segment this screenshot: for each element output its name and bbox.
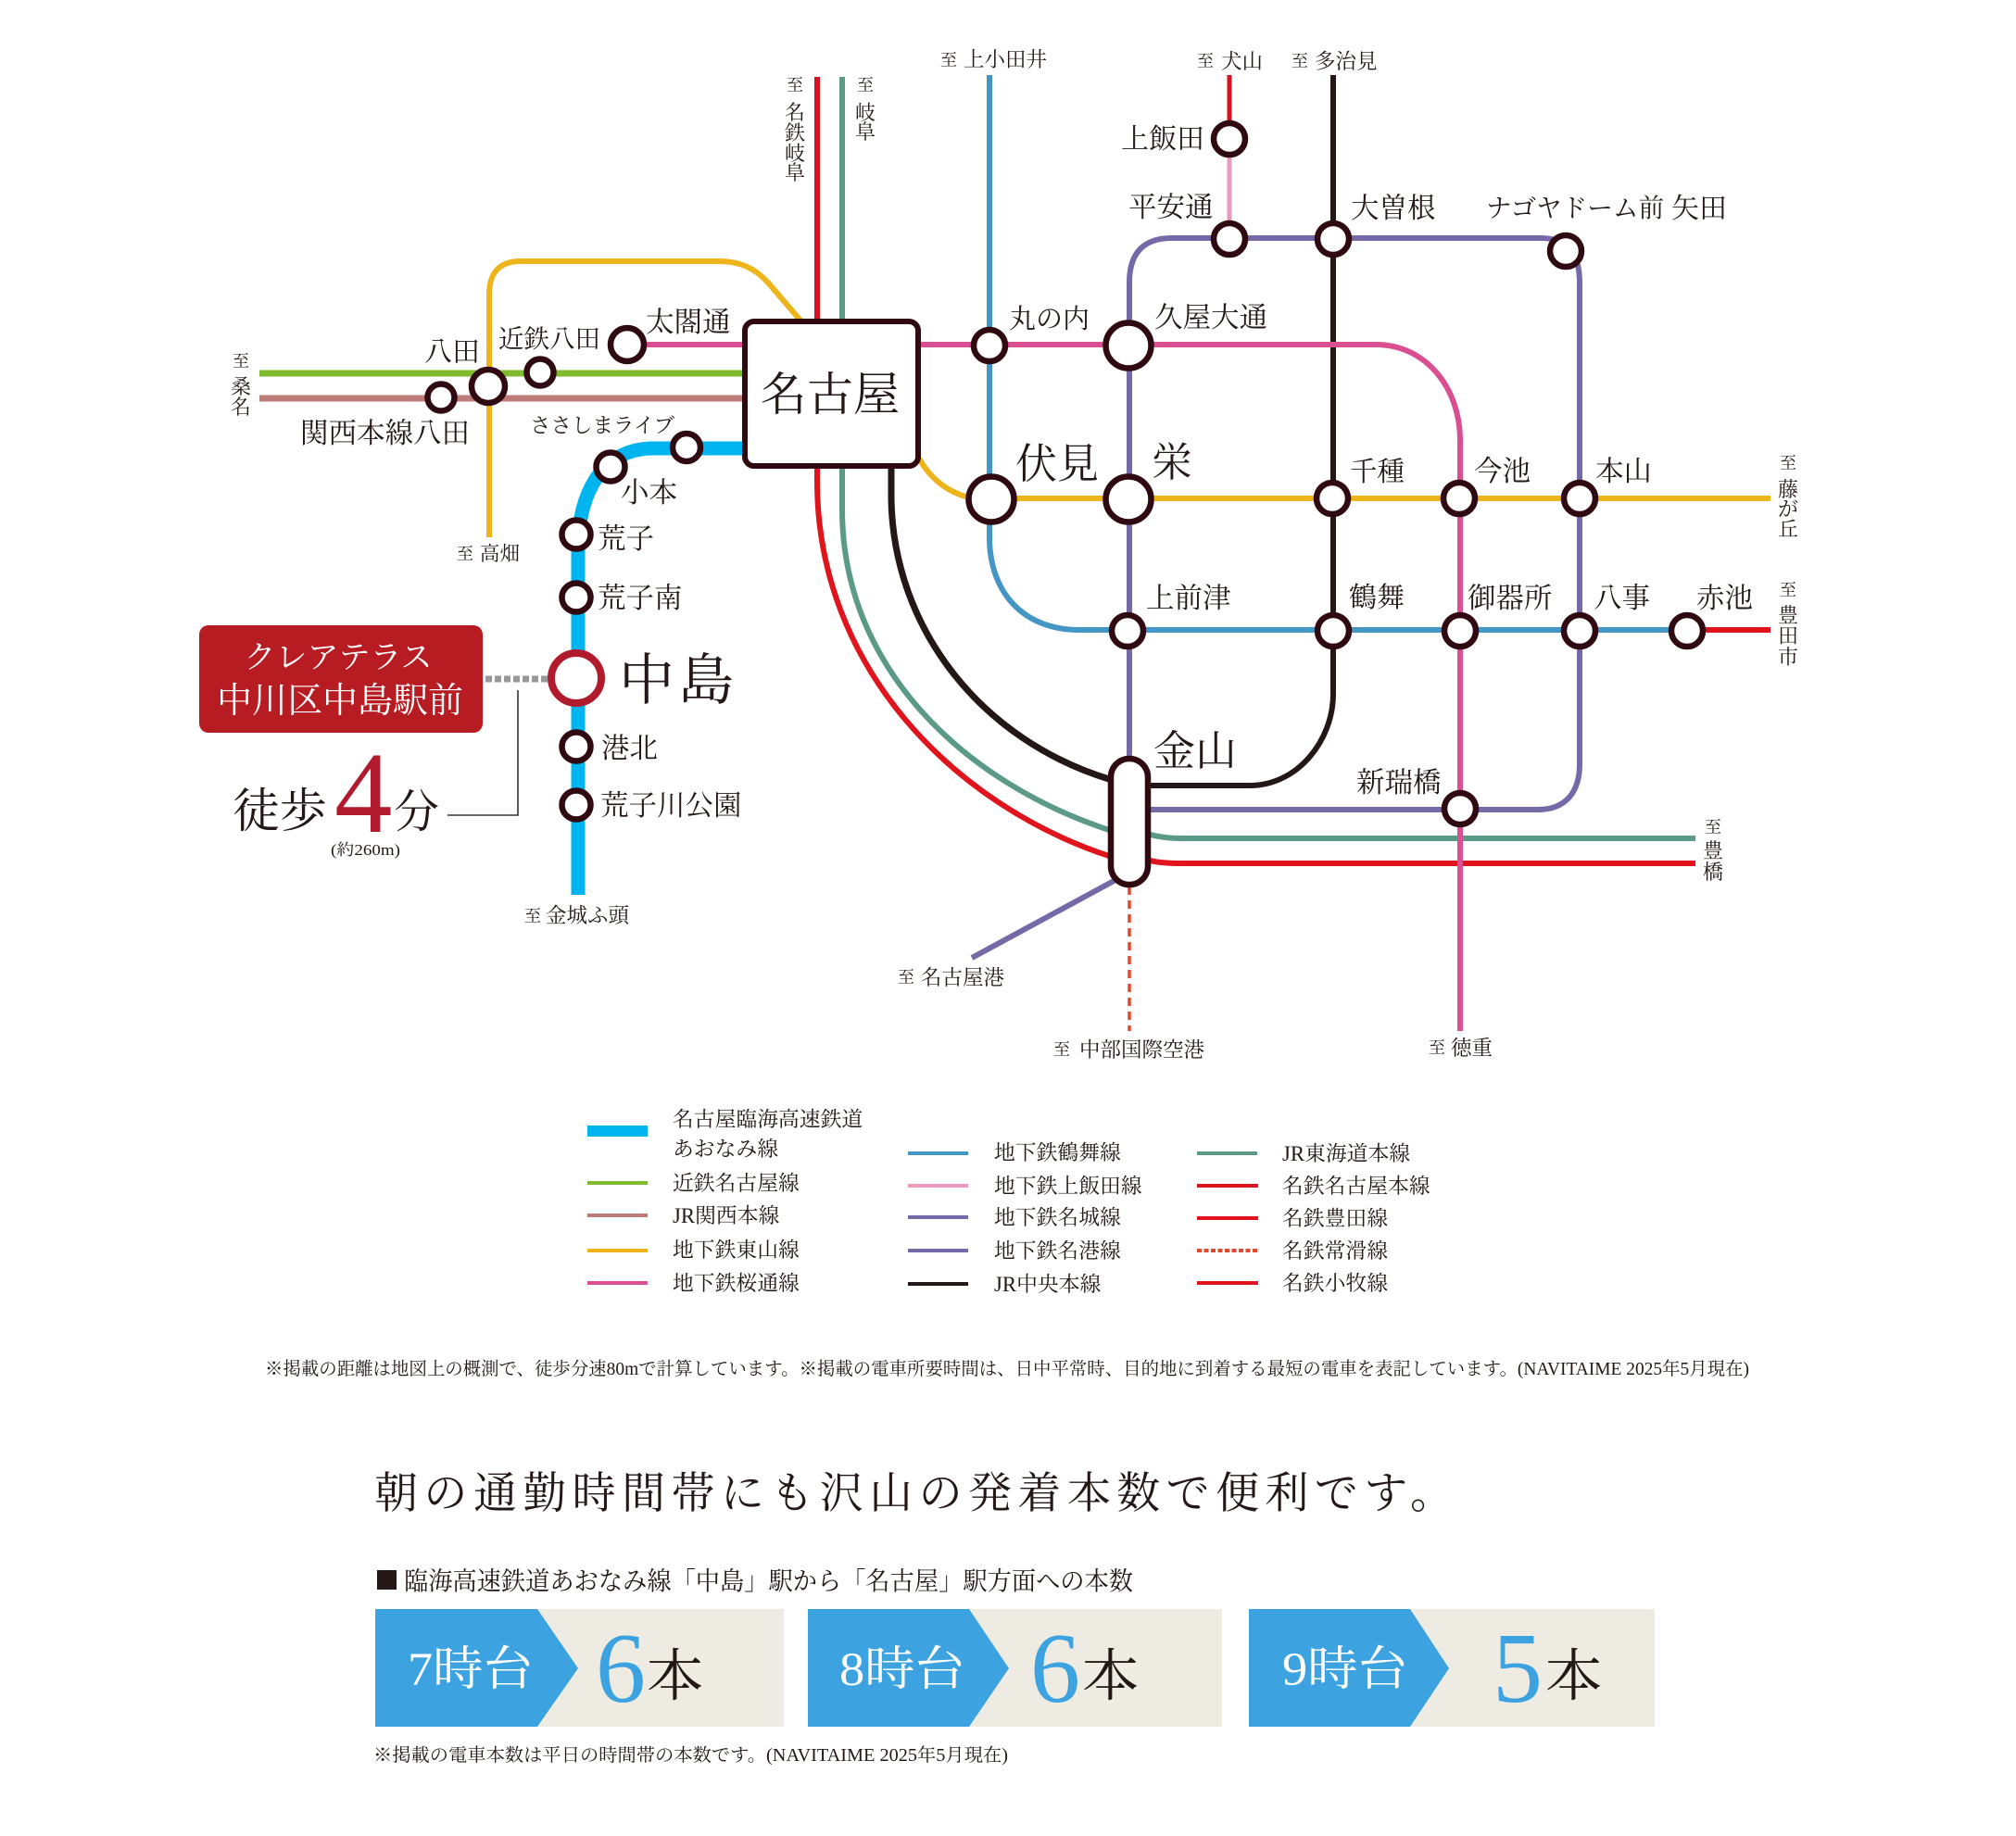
line: Meitetsu Toyota xyxy=(1687,627,1770,633)
terminal direction labels: 至 xyxy=(233,352,249,371)
terminal direction labels: 多治見 xyxy=(1315,50,1378,73)
line: Kamiiida xyxy=(1227,153,1232,227)
property name box: クレアテラス xyxy=(245,641,432,675)
terminal direction labels: 桑 xyxy=(231,375,251,398)
terminal direction labels: 名古屋港 xyxy=(921,966,1004,989)
frequency note: ※掲載の電車本数は平日の時間帯の本数です。(NAVITAIME 2025年5月現在) xyxy=(373,1744,1008,1766)
frequency card: 9時台 xyxy=(1249,1609,1655,1727)
legend: column 2: 地下鉄名城線 xyxy=(994,1206,1121,1229)
station names: 八事 xyxy=(1594,583,1650,614)
station names: 小本 xyxy=(621,477,677,509)
frequency card: 7時台 xyxy=(375,1609,784,1727)
legend: column 2: 地下鉄鶴舞線 xyxy=(994,1141,1121,1164)
station names: 新瑞橋 xyxy=(1356,767,1442,799)
station names: 鶴舞 xyxy=(1349,583,1405,613)
terminal direction labels: 徳重 xyxy=(1451,1037,1493,1060)
station names: 平安通 xyxy=(1128,192,1214,223)
legend: column 1 xyxy=(587,1172,800,1295)
terminal direction labels: 岐 xyxy=(785,142,805,165)
line: Meitetsu Inuyama xyxy=(1227,75,1232,125)
station markers xyxy=(428,123,1703,824)
footnote: ※掲載の距離は地図上の概測で、徒歩分速80mで計算しています。※掲載の電車所要時間は、日中平常時、目的地に到着する最短の電車を表記しています。(NAVITAIME 2025年5月現在) xyxy=(265,1358,1749,1379)
station names: 本山 xyxy=(1595,456,1652,487)
terminal direction labels: 名 xyxy=(231,396,251,419)
property name box xyxy=(199,625,483,733)
terminal direction labels: 橋 xyxy=(1703,861,1723,884)
station names: 金山 xyxy=(1153,728,1237,774)
station names: 伏見 xyxy=(1015,441,1099,487)
line: Aonami xyxy=(578,448,747,895)
terminal direction labels: 至 xyxy=(1197,52,1214,70)
terminal direction labels: 至 xyxy=(1705,818,1721,836)
terminal direction labels: 名 xyxy=(785,101,805,124)
station names: 太閤通 xyxy=(646,307,730,338)
station names: 関西本線八田 xyxy=(300,418,470,449)
terminal direction labels: 上小田井 xyxy=(964,48,1047,71)
terminal direction labels: 中部国際空港 xyxy=(1079,1038,1204,1062)
line: Higashiyama xyxy=(919,459,1770,498)
Nakajima station name: 中島 xyxy=(619,650,734,711)
section heading: 朝の通勤時間帯にも沢山の発着本数で便利です。 xyxy=(374,1470,1454,1518)
frequency card: 8時台: 本 xyxy=(1082,1646,1139,1708)
legend: column 1: 地下鉄東山線 xyxy=(673,1239,800,1262)
terminal direction labels: 至 xyxy=(857,76,874,94)
line: JR Tokaido curve to Kanayama xyxy=(842,463,1112,831)
frequency card: 7時台: 6 xyxy=(596,1614,646,1724)
Nagoya station box: 名古屋 xyxy=(761,369,900,421)
frequency card: 9時台: 本 xyxy=(1545,1646,1602,1708)
station names: 荒子南 xyxy=(598,583,682,614)
terminal direction labels: 阜 xyxy=(785,161,805,184)
legend: Aonami: あおなみ線 xyxy=(673,1138,778,1161)
legend: column 3 xyxy=(1197,1142,1430,1295)
frequency card: 9時台: 9時台 xyxy=(1282,1644,1408,1696)
terminal direction labels: 豊 xyxy=(1778,604,1798,627)
frequency card: 9時台: 5 xyxy=(1493,1614,1543,1724)
walk time: (約260m) xyxy=(331,841,400,859)
frequency card: 7時台: 本 xyxy=(647,1646,703,1708)
station names: 今池 xyxy=(1474,456,1531,487)
terminal direction labels: 犬山 xyxy=(1221,50,1263,73)
terminal direction labels: 至 xyxy=(1780,454,1796,472)
terminal direction labels: 至 xyxy=(1780,581,1796,599)
station names: 千種 xyxy=(1350,457,1405,487)
line: Kintetsu Nagoya xyxy=(259,371,747,376)
legend: Aonami: 名古屋臨海高速鉄道 xyxy=(673,1108,863,1131)
legend: column 3: 名鉄小牧線 xyxy=(1282,1272,1388,1295)
Nakajima station marker xyxy=(551,653,601,703)
walking bracket line xyxy=(447,690,518,815)
terminal direction labels: 至 xyxy=(898,968,914,987)
Nagoya station box xyxy=(745,321,918,466)
terminal direction labels: 至 xyxy=(940,51,957,69)
station names: 矢田 xyxy=(1671,194,1727,224)
station names: ささしまライブ xyxy=(530,414,675,437)
legend: column 1: JR関西本線 xyxy=(673,1204,779,1227)
legend: column 3: 名鉄常滑線 xyxy=(1282,1239,1388,1263)
station names: 丸の内 xyxy=(1009,304,1090,334)
station names xyxy=(300,124,1753,822)
line: JR Chuo xyxy=(1144,75,1333,786)
Kanayama station capsule xyxy=(1111,759,1148,885)
legend: column 1: 地下鉄桜通線 xyxy=(673,1272,800,1295)
terminal direction labels: 至 xyxy=(457,545,473,563)
station names: 赤池 xyxy=(1696,583,1753,614)
walk time: 徒歩 xyxy=(233,786,327,838)
line: Meitetsu Tokoname xyxy=(1128,887,1131,1031)
legend: column 1: 近鉄名古屋線 xyxy=(673,1172,800,1195)
frequency card: 8時台: 6 xyxy=(1030,1614,1080,1724)
legend: column 2: 地下鉄名港線 xyxy=(994,1239,1121,1263)
terminal direction labels: 至 xyxy=(1053,1040,1070,1059)
terminal direction labels: 至 xyxy=(1292,52,1308,70)
walk time: 分 xyxy=(394,786,439,837)
line: Meiko xyxy=(972,880,1115,958)
line: JR Tokaido north xyxy=(839,77,845,324)
terminal direction labels: 岐 xyxy=(855,101,876,124)
dotted connector xyxy=(485,676,548,682)
terminal direction labels: 阜 xyxy=(855,120,876,144)
legend: column 2: 地下鉄上飯田線 xyxy=(994,1175,1142,1198)
terminal direction labels xyxy=(231,48,1798,1062)
line: JR Kansai xyxy=(259,395,747,402)
station names: 大曽根 xyxy=(1351,193,1436,224)
legend: column 3: 名鉄名古屋本線 xyxy=(1282,1175,1430,1198)
station names: 荒子 xyxy=(598,523,654,555)
line: Meijo xyxy=(1129,238,1580,810)
terminal direction labels: 至 xyxy=(787,76,803,94)
legend: column 3: JR東海道本線 xyxy=(1282,1142,1410,1165)
line: JR Chuo west curve xyxy=(891,463,1112,780)
walk time xyxy=(233,730,439,859)
terminal direction labels: 豊 xyxy=(1703,839,1723,862)
terminal direction labels: 田 xyxy=(1778,624,1798,648)
terminal direction labels: 市 xyxy=(1778,646,1798,669)
line: Meitetsu curve to Kanayama xyxy=(817,463,1112,857)
station names: 上前津 xyxy=(1146,583,1230,614)
line: Tokaido east xyxy=(1147,834,1695,838)
terminal direction labels: 金城ふ頭 xyxy=(546,904,630,927)
property callout xyxy=(199,625,548,859)
terminal direction labels: 丘 xyxy=(1778,518,1798,541)
frequency card: 7時台: 7時台 xyxy=(408,1644,534,1696)
line: Meitetsu east xyxy=(1147,860,1695,863)
line: Sakura-dori xyxy=(627,345,1460,1031)
line: Higashiyama west branch xyxy=(489,261,800,537)
station names: 八田 xyxy=(424,337,480,368)
frequency card: 8時台 xyxy=(808,1609,1222,1727)
station names: 上飯田 xyxy=(1121,124,1204,155)
terminal direction labels: 高畑 xyxy=(480,543,520,565)
station names: 荒子川公園 xyxy=(600,790,741,822)
walk time: 4 xyxy=(334,730,393,858)
legend: Aonami xyxy=(587,1108,863,1161)
terminal direction labels: 鉄 xyxy=(785,121,805,145)
legend: column 3: 名鉄豊田線 xyxy=(1282,1207,1388,1230)
legend xyxy=(587,1108,1430,1296)
property name box: 中川区中島駅前 xyxy=(217,682,463,721)
station names: 近鉄八田 xyxy=(498,324,600,353)
station names: 栄 xyxy=(1152,440,1192,485)
terminal direction labels: が xyxy=(1778,497,1798,521)
terminal direction labels: 藤 xyxy=(1778,478,1798,501)
frequency card: 8時台: 8時台 xyxy=(839,1644,965,1696)
station names: ナゴヤドーム前 xyxy=(1486,194,1664,222)
route map xyxy=(231,48,1798,1062)
line: Tsurumai xyxy=(989,75,1687,630)
line: Meitetsu north xyxy=(814,77,820,324)
terminal direction labels: 至 xyxy=(1429,1038,1445,1057)
legend: column 2 xyxy=(908,1141,1142,1296)
legend: column 2: JR中央本線 xyxy=(994,1273,1101,1296)
terminal direction labels: 至 xyxy=(524,907,541,925)
station names: 港北 xyxy=(601,733,658,764)
sub heading: 臨海高速鉄道あおなみ線「中島」駅から「名古屋」駅方面への本数 xyxy=(404,1566,1133,1595)
station names: 御器所 xyxy=(1468,583,1553,614)
station names: 久屋大通 xyxy=(1154,302,1267,333)
